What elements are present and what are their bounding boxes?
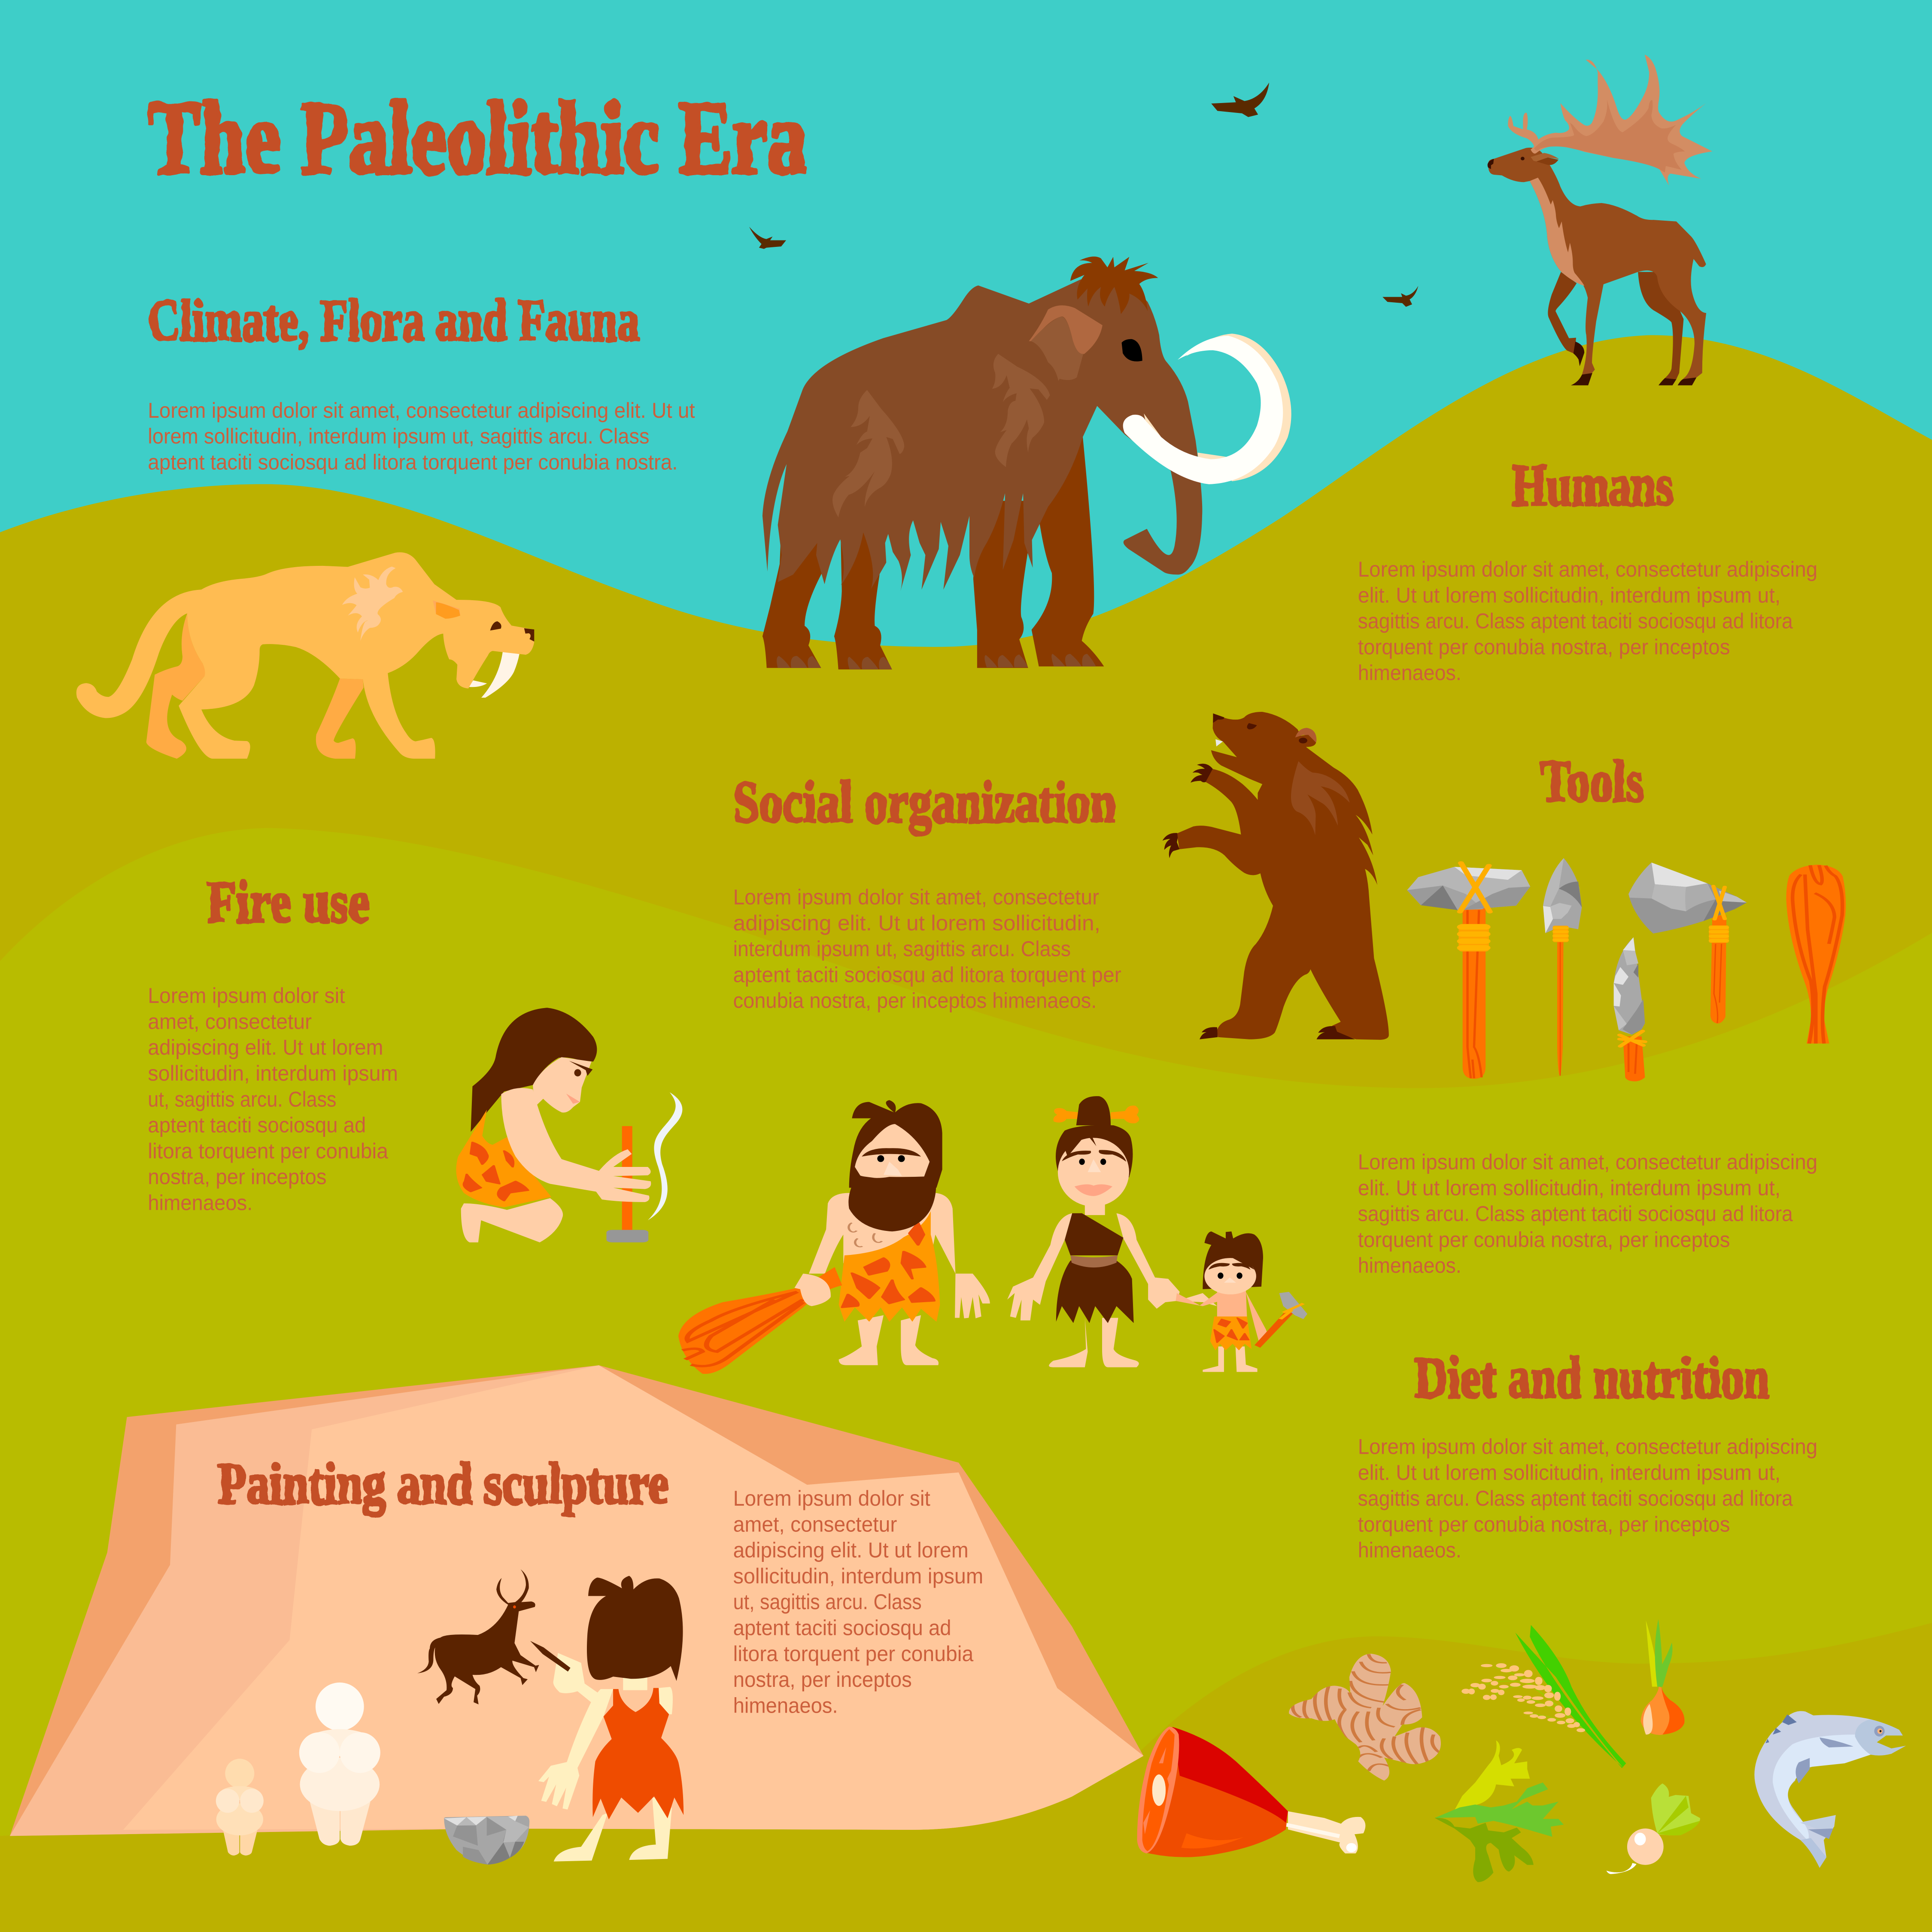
food: seaweed <box>1435 1741 1564 1882</box>
text: tools: himenaeos. <box>1358 1253 1461 1278</box>
text: diet and nutrition: sagittis arcu. Class aptent taciti sociosqu ad litora <box>1358 1486 1793 1510</box>
text: fire use: amet, consectetur <box>148 1009 312 1033</box>
heading: painting and sculpture: Painting and sculpture <box>218 1450 669 1516</box>
text: tools <box>1358 1150 1817 1278</box>
heading: diet and nutrition: Diet and nutrition <box>1415 1345 1769 1410</box>
text: social organization: Lorem ipsum dolor sit amet, consectetur <box>733 885 1099 909</box>
food: salmon <box>1754 1711 1906 1868</box>
tool: stone hammer <box>1407 863 1530 1079</box>
text: climate <box>148 398 695 474</box>
text: tools: sagittis arcu. Class aptent taciti sociosqu ad litora <box>1358 1201 1793 1226</box>
food: meat leg <box>1137 1726 1365 1857</box>
icon: birds <box>749 82 1418 307</box>
text: fire use: litora torquent per conubia <box>148 1139 389 1163</box>
text: tools: Lorem ipsum dolor sit amet, consectetur adipiscing <box>1358 1150 1817 1174</box>
illustration: caveman with club <box>678 1100 990 1374</box>
text: fire use: Lorem ipsum dolor sit <box>148 983 345 1008</box>
text: fire use: adipiscing elit. Ut ut lorem <box>148 1035 383 1060</box>
heading: tools: Tools <box>1540 748 1644 814</box>
text: humans: elit. Ut ut lorem sollicitudin, interdum ipsum ut, <box>1358 583 1780 607</box>
text: diet and nutrition: torquent per conubia nostra, per inceptos <box>1358 1512 1730 1536</box>
text: social organization: adipiscing elit. Ut ut lorem sollicitudin, <box>733 911 1100 935</box>
sculpture: large venus figurine <box>299 1683 380 1846</box>
text: painting and sculpture: amet, consectetur <box>733 1512 897 1536</box>
heading: fire use: Fire use <box>207 869 370 935</box>
text: fire use: nostra, per inceptos <box>148 1164 327 1189</box>
text: humans: Lorem ipsum dolor sit amet, consectetur adipiscing <box>1358 557 1817 581</box>
food: radish <box>1606 1783 1700 1874</box>
illustration: cave painting of deer <box>417 1569 539 1704</box>
text: diet and nutrition <box>1358 1434 1817 1562</box>
text: tools: elit. Ut ut lorem sollicitudin, interdum ipsum ut, <box>1358 1176 1780 1200</box>
text: diet and nutrition: Lorem ipsum dolor sit amet, consectetur adipiscing <box>1358 1434 1817 1459</box>
text: tools: torquent per conubia nostra, per inceptos <box>1358 1227 1730 1252</box>
tool: spear <box>1543 858 1582 1076</box>
illustration: cave painter <box>530 1576 683 1862</box>
text: painting and sculpture: ut, sagittis arcu. Class <box>733 1589 922 1614</box>
text: climate: aptent taciti sociosqu ad litora torquent per conubia nostra. <box>148 450 677 474</box>
illustration: cavewoman <box>1007 1096 1217 1367</box>
text: painting and sculpture: aptent taciti sociosqu ad <box>733 1615 951 1640</box>
text: climate: lorem sollicitudin, interdum ipsum ut, sagittis arcu. Class <box>148 424 649 448</box>
text: humans: torquent per conubia nostra, per inceptos <box>1358 635 1730 659</box>
text: social organization: aptent taciti sociosqu ad litora torquent per <box>733 962 1121 987</box>
text: painting and sculpture: sollicitudin, interdum ipsum <box>733 1564 983 1588</box>
text: fire use: himenaeos. <box>148 1190 252 1215</box>
heading: social organization: Social organization <box>733 769 1116 835</box>
illustration: mammoth <box>762 256 1291 669</box>
icon: stone bowl <box>444 1816 529 1865</box>
illustration: giant deer <box>1488 55 1712 386</box>
text: painting and sculpture: litora torquent per conubia <box>733 1641 974 1666</box>
text: climate: Lorem ipsum dolor sit amet, consectetur adipiscing elit. Ut ut <box>148 398 695 422</box>
text: painting and sculpture <box>733 1486 983 1717</box>
text: humans <box>1358 557 1817 685</box>
text: diet and nutrition: elit. Ut ut lorem sollicitudin, interdum ipsum ut, <box>1358 1460 1780 1485</box>
text: humans: sagittis arcu. Class aptent taciti sociosqu ad litora <box>1358 609 1793 633</box>
text: social organization: interdum ipsum ut, sagittis arcu. Class <box>733 936 1071 961</box>
illustration: brown bear <box>1163 712 1389 1040</box>
illustration: woman making fire <box>456 1008 682 1242</box>
heading: humans: Humans <box>1512 453 1673 518</box>
text: fire use: sollicitudin, interdum ipsum <box>148 1061 398 1085</box>
text: social organization: conubia nostra, per inceptos himenaeos. <box>733 988 1097 1013</box>
text: painting and sculpture: Lorem ipsum dolor sit <box>733 1486 930 1510</box>
illustration: sabre-tooth tiger <box>76 552 534 759</box>
food: rice and grass <box>1462 1625 1626 1768</box>
text: painting and sculpture: himenaeos. <box>733 1693 838 1717</box>
tool: wooden club <box>1786 865 1846 1044</box>
heading: climate, flora and fauna: Climate, Flora and Fauna <box>148 287 640 353</box>
text: diet and nutrition: himenaeos. <box>1358 1538 1461 1562</box>
title: The Paleolithic Era <box>148 81 807 195</box>
food: onion <box>1640 1619 1685 1735</box>
tool: stone axe <box>1628 863 1747 1024</box>
text: painting and sculpture: adipiscing elit. Ut ut lorem <box>733 1538 969 1562</box>
text: fire use <box>148 983 398 1215</box>
text: painting and sculpture: nostra, per inceptos <box>733 1667 912 1692</box>
illustration: stone tools <box>1407 858 1846 1081</box>
text: social organization <box>733 885 1121 1013</box>
tool: flint knife <box>1614 937 1645 1081</box>
text: fire use: ut, sagittis arcu. Class <box>148 1087 337 1111</box>
illustration: child <box>1176 1231 1307 1372</box>
text: fire use: aptent taciti sociosqu ad <box>148 1113 366 1137</box>
sculpture: small venus figurine <box>216 1759 264 1856</box>
rock wall <box>10 1365 1143 1836</box>
text: humans: himenaeos. <box>1358 660 1461 685</box>
food: ginger root <box>1289 1654 1441 1780</box>
